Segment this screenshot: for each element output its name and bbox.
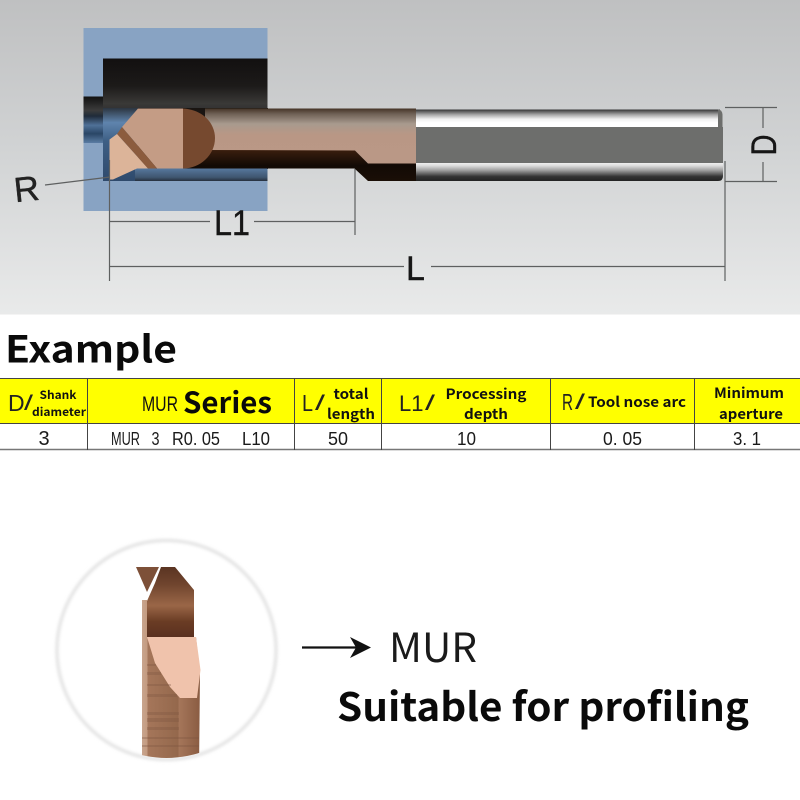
header: MUR Series: MUR	[142, 393, 178, 416]
table data row: 50	[328, 429, 348, 449]
carbide shank	[416, 110, 723, 181]
table header band	[0, 378, 800, 423]
header: shank diameter: diameter	[32, 404, 87, 420]
label D: D	[745, 134, 784, 156]
header: shank diameter	[8, 387, 87, 420]
dimension lines	[45, 108, 777, 281]
header: processing depth: L1	[399, 391, 423, 416]
header: MUR Series: Series	[183, 380, 272, 422]
product photo circle	[57, 540, 276, 770]
header: minimum aperture	[714, 383, 784, 424]
table data row: 3	[152, 429, 160, 449]
table data row: MUR	[111, 429, 140, 449]
table data row	[38, 428, 761, 450]
header: minimum aperture: Minimum	[714, 383, 784, 403]
header: tool nose arc: /	[575, 391, 585, 414]
table data row: 10	[457, 429, 476, 449]
arrow to MUR	[302, 637, 371, 658]
header: tool nose arc: R	[562, 389, 573, 415]
header: total length: /	[315, 392, 325, 415]
header: shank diameter: Shank	[40, 387, 77, 403]
header: minimum aperture: aperture	[719, 404, 783, 424]
tool neck	[190, 108, 416, 181]
heading: Example: Example	[5, 320, 177, 374]
header: processing depth: depth	[464, 404, 508, 424]
tool tip	[110, 108, 215, 180]
label L: L	[406, 250, 425, 288]
label L1: L1	[214, 204, 250, 243]
table data row: 3	[38, 428, 50, 450]
caption: Suitable for profiling: Suitable for profiling	[337, 677, 749, 733]
workpiece block	[84, 28, 268, 211]
header: processing depth: /	[425, 392, 435, 415]
header: total length: length	[327, 404, 375, 424]
header: total length: total	[334, 384, 369, 404]
table data row: R0. 05	[172, 429, 220, 449]
label: MUR: MUR	[389, 616, 477, 674]
diagram panel: tool dimensions	[0, 0, 800, 314]
header: total length: L	[302, 390, 313, 416]
table data row: 0. 05	[603, 429, 642, 449]
label R: R	[12, 169, 41, 210]
table data row: 3. 1	[733, 429, 761, 449]
header: processing depth	[399, 384, 527, 424]
cutter photo	[136, 567, 200, 770]
specification table	[0, 378, 800, 450]
header: total length	[302, 384, 375, 424]
header: tool nose arc: Tool nose arc	[588, 392, 686, 412]
header: tool nose arc	[562, 389, 686, 415]
table data row: L10	[242, 429, 270, 449]
header: shank diameter: D	[8, 390, 25, 416]
header: MUR Series	[142, 380, 272, 422]
header: shank diameter: /	[24, 392, 33, 415]
header: processing depth: Processing	[446, 384, 527, 404]
table grid	[0, 378, 800, 450]
